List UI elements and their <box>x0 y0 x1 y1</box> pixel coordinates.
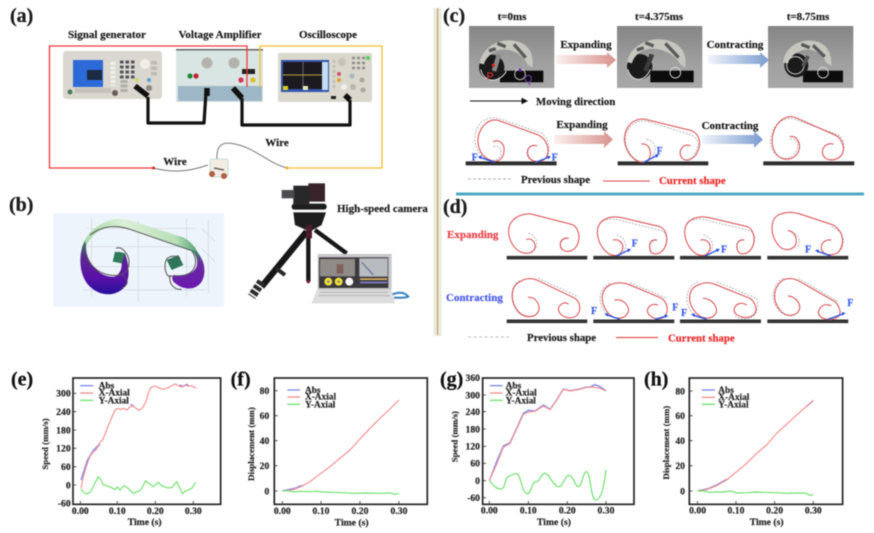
legend g: X-Axial <box>506 389 537 399</box>
legend h: Y-Axial <box>718 400 749 410</box>
chart h: displacement: 0.00 <box>689 505 706 516</box>
time label 4.375: t=4.375ms <box>635 11 684 23</box>
wire: yellow circuit <box>260 46 382 168</box>
chart f: displacement: 0.00 <box>274 506 291 517</box>
chart e: speed: 0.00 <box>72 506 89 517</box>
chart e: speed: 0.30 <box>185 506 202 517</box>
legend f: X-Axial <box>305 393 336 403</box>
ground lines <box>466 157 854 169</box>
sample with thin wires <box>152 143 288 179</box>
chart h: displacement: 0.20 <box>766 505 783 516</box>
label b: (b) <box>9 194 33 216</box>
chart f: displacement: 0.10 <box>313 506 330 517</box>
chart e: speed: 120 <box>56 444 71 455</box>
label: moving direction: Moving direction <box>536 96 615 108</box>
arrow: contracting diagram row <box>702 131 763 148</box>
high-speed camera on tripod with laptop <box>252 183 408 303</box>
chart h: displacement: 20 <box>675 461 685 472</box>
legend: previous shape: Previous shape <box>527 332 596 344</box>
contracting 4 <box>773 278 853 320</box>
chart g: speed: 240 <box>466 407 480 418</box>
chart g: speed: Speed (mm/s) <box>449 411 459 462</box>
device: oscilloscope <box>278 53 372 102</box>
legend e: Abs <box>99 382 115 392</box>
expanding 1 <box>509 214 579 253</box>
expanding 2 <box>597 217 667 256</box>
diagram: shape 2 <box>624 119 700 163</box>
chart h: displacement: 80 <box>675 386 685 397</box>
label: contracting top: Contracting <box>707 39 764 51</box>
chart e: speed <box>11 369 221 528</box>
chart f: displacement: Time (s) <box>335 518 369 529</box>
divider: vertical <box>434 8 442 336</box>
legend h <box>702 386 750 410</box>
device: signal generator <box>63 51 162 99</box>
panel c: time-lapse and shapes <box>443 5 854 187</box>
legend h: X-Axial <box>718 393 750 403</box>
legend e: Y-Axial <box>99 396 129 406</box>
label: high-speed camera: High-speed camera <box>337 203 428 215</box>
diagram: shape 3 <box>771 117 844 160</box>
chart f: displacement <box>231 369 427 529</box>
time label 0: t=0ms <box>498 11 527 23</box>
legend: current shape <box>616 332 735 344</box>
legend e: X-Axial <box>99 389 130 399</box>
arrow: contracting photo row <box>708 52 769 68</box>
contracting 4: F <box>847 298 853 309</box>
photo 1 <box>469 26 554 88</box>
wire: red circuit <box>50 46 247 168</box>
label: expanding top: Expanding <box>560 39 612 51</box>
chart h: displacement: Time (s) <box>750 517 784 528</box>
chart f: displacement: Displacement (mm) <box>246 407 256 481</box>
chart h: displacement: 60 <box>675 411 685 422</box>
contracting 2: F <box>672 303 678 314</box>
arrow: moving direction <box>470 98 527 104</box>
chart e: speed: Speed (mm/s) <box>40 418 50 470</box>
chart e: speed: 300 <box>56 389 71 400</box>
chart g: speed: 300 <box>466 390 480 401</box>
contracting 2 <box>591 283 678 319</box>
point P: P <box>486 71 494 83</box>
panel a: circuit setup <box>10 5 382 179</box>
device: voltage amplifier <box>176 49 263 102</box>
chart f: displacement: 80 <box>260 386 269 397</box>
chart h: displacement: 0 <box>680 486 685 497</box>
legend: previous shape: Previous shape <box>521 174 590 186</box>
chart e: speed: 240 <box>56 407 71 418</box>
chart g: speed: 0.10 <box>520 505 537 516</box>
chart f: displacement: 20 <box>260 461 269 472</box>
divider: horizontal teal <box>456 192 864 196</box>
label g: (g) <box>440 369 463 391</box>
chart e: speed: -60 <box>58 499 71 510</box>
chart h: displacement: Displacement (mm) <box>661 406 671 480</box>
expanding 4 <box>772 212 843 256</box>
time label 8.75: t=8.75ms <box>787 11 830 23</box>
legend: previous shape <box>468 174 590 186</box>
label: expanding bottom: Expanding <box>556 119 608 131</box>
chart h: displacement: 0.10 <box>728 505 745 516</box>
legend: previous shape <box>468 332 596 344</box>
label: contracting bottom: Contracting <box>702 120 759 132</box>
legend f: Y-Axial <box>305 400 336 410</box>
diagram: shape 1: F <box>472 153 478 164</box>
legend f <box>287 386 336 410</box>
legend g <box>490 382 537 406</box>
contracting 1 <box>512 278 580 318</box>
contracting 3: F <box>681 308 687 319</box>
legend e <box>80 382 130 406</box>
arrow: expanding diagram row <box>554 131 613 148</box>
label h: (h) <box>644 369 668 391</box>
chart g: speed: 0 <box>475 476 480 487</box>
chart h: displacement: 0.30 <box>805 505 822 516</box>
chart f: displacement: 60 <box>260 411 269 422</box>
expanding 2: F <box>632 239 638 250</box>
arrow: expanding photo row <box>556 52 616 68</box>
chart e: speed: 180 <box>56 425 71 436</box>
chart f: displacement: 0.20 <box>352 506 369 517</box>
chart g: speed: 0.20 <box>559 505 576 516</box>
label e: (e) <box>11 369 33 391</box>
cable: generator to amplifier <box>135 86 207 123</box>
legend: current shape <box>603 175 726 187</box>
label a: (a) <box>10 5 33 27</box>
heading: voltage amplifier: Voltage Amplifier <box>178 29 262 41</box>
legend g: Abs <box>506 382 522 392</box>
heading: oscilloscope: Oscilloscope <box>299 29 357 41</box>
chart g: speed <box>440 369 634 528</box>
diagram: shape 1 <box>472 118 558 164</box>
chart e and f <box>11 369 427 529</box>
row label: contracting: Contracting <box>446 292 503 304</box>
diagrams <box>507 212 853 321</box>
expanding 3: F <box>721 245 727 256</box>
chart f: displacement: 0.30 <box>391 506 408 517</box>
chart g: speed: 0.00 <box>481 505 498 516</box>
legend f: Abs <box>305 386 321 396</box>
heading: signal generator: Signal generator <box>68 29 146 41</box>
chart g: speed: Time (s) <box>537 517 571 528</box>
chart g: speed: 360 <box>466 373 480 384</box>
chart g: speed: 120 <box>466 442 480 453</box>
ground lines <box>507 258 848 321</box>
chart g: speed: 60 <box>470 459 480 470</box>
panel d: deformation sequence <box>443 196 853 344</box>
legend: current shape: Current shape <box>659 175 726 187</box>
label: wire right: Wire <box>265 137 289 149</box>
chart h: displacement <box>644 369 843 528</box>
chart f: displacement: 0 <box>264 486 269 497</box>
simulation render <box>53 213 224 307</box>
chart e: speed: Time (s) <box>128 517 162 528</box>
contracting 3 <box>681 282 758 319</box>
label d: (d) <box>443 196 467 218</box>
point Q: Q <box>524 74 532 86</box>
expanding 3 <box>685 217 755 256</box>
chart g: speed: 0.30 <box>598 505 615 516</box>
label f: (f) <box>231 369 251 391</box>
chart e: speed: 0.20 <box>147 506 164 517</box>
label c: (c) <box>443 5 465 27</box>
label: wire left: Wire <box>163 156 187 168</box>
shape diagrams <box>466 117 854 164</box>
chart f: displacement: 40 <box>260 436 269 447</box>
chart e: speed: 0 <box>66 480 71 491</box>
chart h: displacement: 40 <box>675 436 685 447</box>
row label: expanding: Expanding <box>447 229 499 241</box>
diagram: shape 2: F <box>657 146 663 157</box>
legend h: Abs <box>718 386 734 396</box>
legend: current shape: Current shape <box>668 332 735 344</box>
chart g and h <box>440 369 843 528</box>
panel b: simulation and camera <box>9 183 428 307</box>
expanding 4: F <box>805 245 811 256</box>
photo 3 <box>768 26 853 88</box>
chart e: speed: 0.10 <box>109 506 126 517</box>
photo 2 <box>617 26 702 88</box>
cable: amplifier to oscilloscope <box>233 88 350 125</box>
chart g: speed: 180 <box>466 424 480 435</box>
legend g: Y-Axial <box>506 396 536 406</box>
chart g: speed: -60 <box>467 493 480 504</box>
diagram: shape 1: F <box>552 153 558 164</box>
chart e: speed: 60 <box>61 462 71 473</box>
contracting 2: F <box>591 306 597 317</box>
